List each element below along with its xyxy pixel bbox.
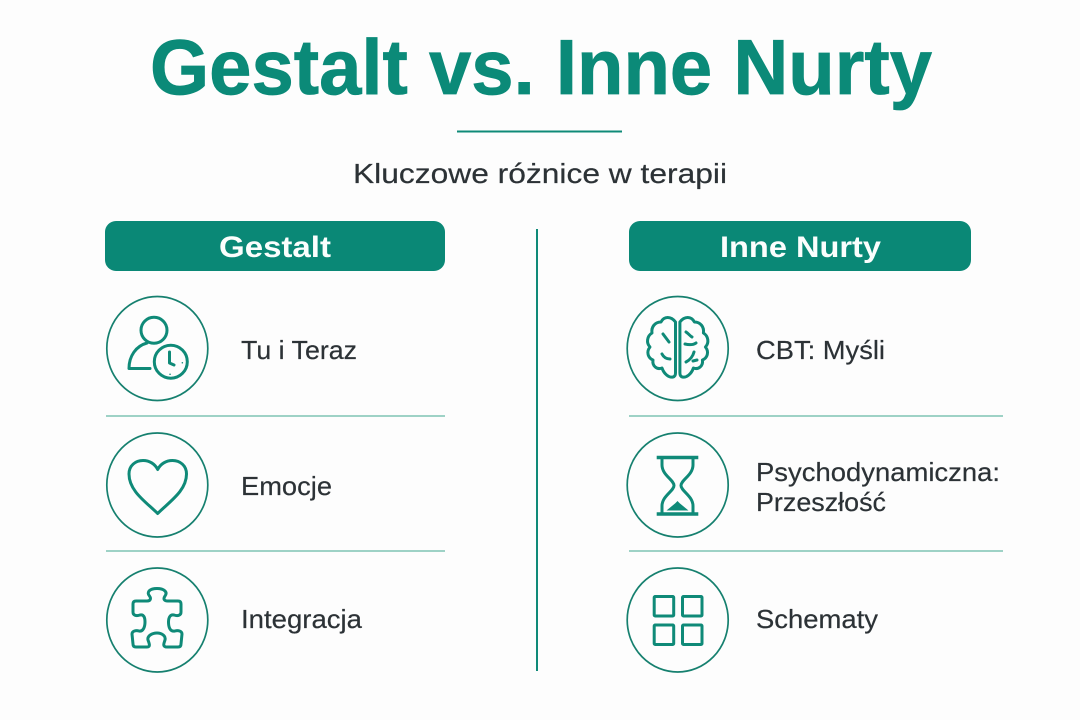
heading: Gestalt xyxy=(105,221,445,271)
item: Tu i Teraz xyxy=(107,296,357,400)
label: CBT: Myśli xyxy=(756,335,885,365)
label: Psychodynamiczna: xyxy=(756,457,1000,487)
icon: brain xyxy=(648,318,708,377)
item: Emocje xyxy=(107,433,332,537)
heading: Inne Nurty: Inne Nurty xyxy=(720,231,881,264)
item: Psychodynamiczna xyxy=(627,433,1000,537)
icon: heart xyxy=(129,460,186,514)
icon: hourglass xyxy=(657,458,698,514)
heading: Inne Nurty xyxy=(629,221,971,271)
title: Gestalt vs. Inne Nurty xyxy=(150,23,932,111)
icon: person with clock xyxy=(129,317,187,378)
subtitle: Kluczowe różnice w terapii xyxy=(353,158,727,189)
label: Tu i Teraz xyxy=(241,335,357,365)
icon: grid xyxy=(654,596,702,644)
panel: Gestalt xyxy=(105,221,445,672)
label: Schematy xyxy=(756,604,878,634)
icon: puzzle piece xyxy=(132,588,182,647)
label: Przeszłość xyxy=(756,487,886,517)
label xyxy=(756,457,1000,517)
heading: Gestalt: Gestalt xyxy=(219,231,331,264)
label: Integracja xyxy=(241,604,363,634)
item: Integracja xyxy=(107,568,363,672)
item: CBT xyxy=(627,296,885,400)
label: Emocje xyxy=(241,471,332,501)
item: Schematy xyxy=(627,568,878,672)
panel: Inne Nurty xyxy=(627,221,1003,672)
